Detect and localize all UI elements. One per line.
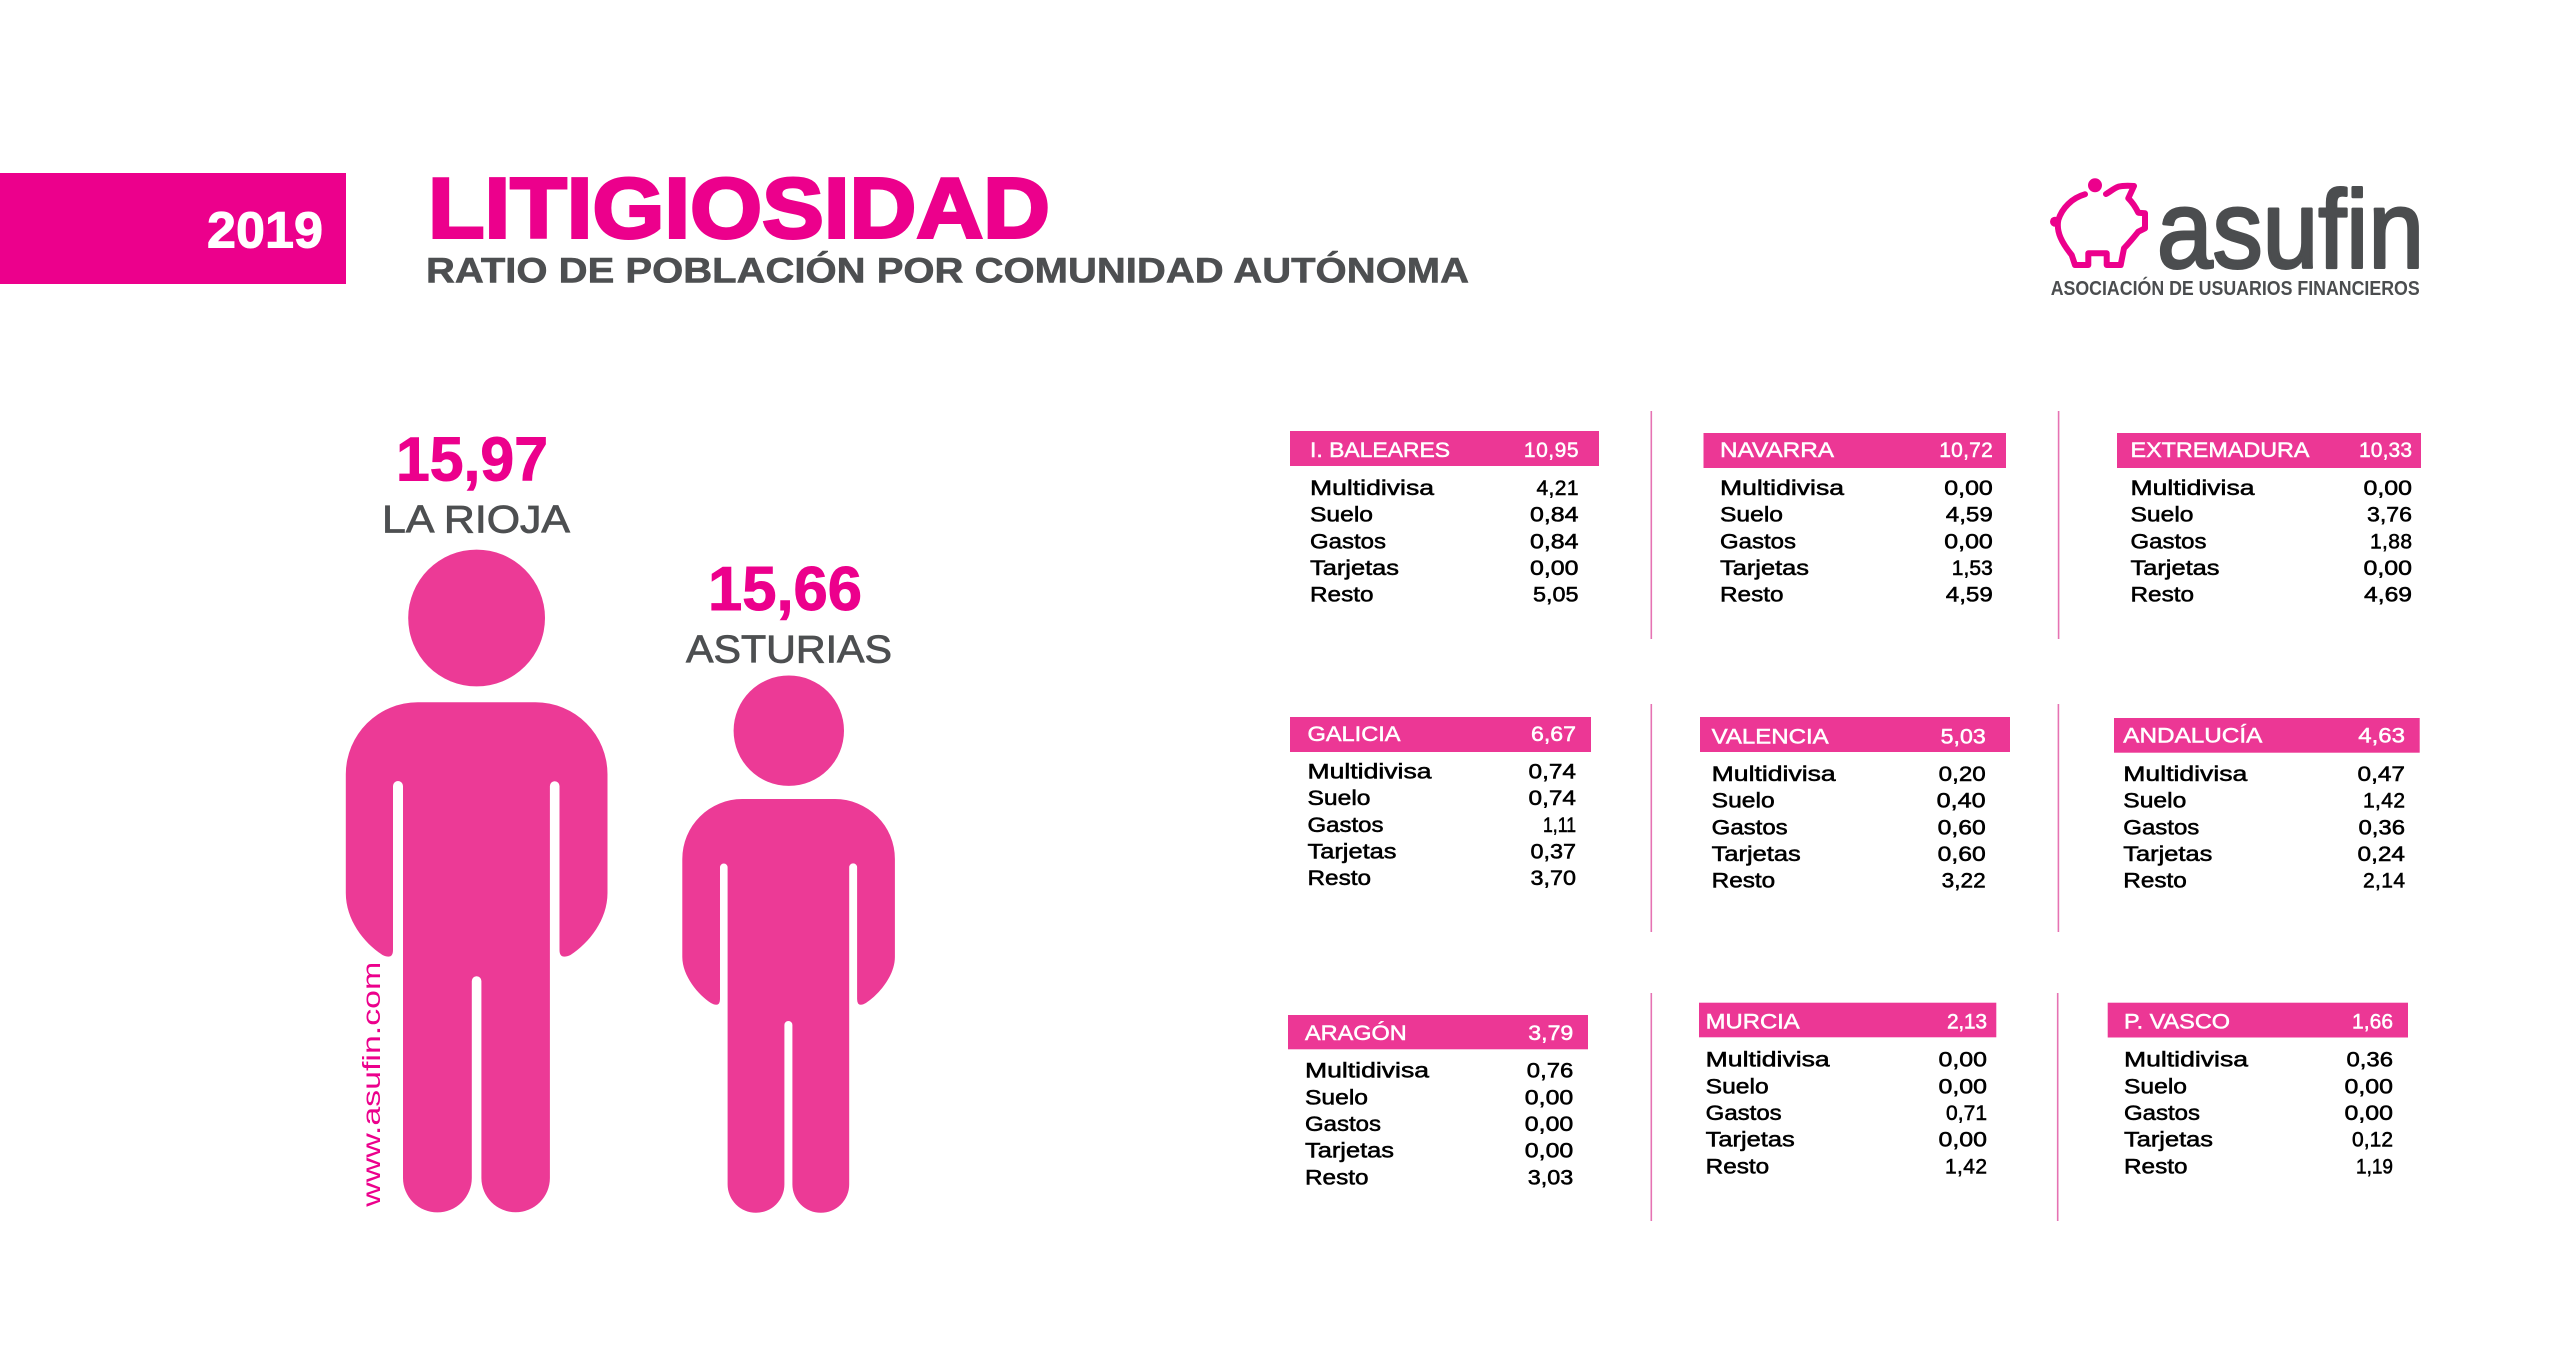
header: Aragón: ARAGÓN xyxy=(1305,1022,1407,1045)
rows: Galicia xyxy=(1308,760,1576,890)
header: Andalucía xyxy=(2114,718,2420,753)
rows: Extremadura: Tarjetas xyxy=(2130,557,2220,580)
rows: Aragón: 0,76 xyxy=(1527,1060,1573,1083)
header: I. Baleares: 10,95 xyxy=(1524,439,1578,462)
logo tagline: ASOCIACIÓN DE USUARIOS FINANCIEROS xyxy=(2051,276,2420,300)
rows: Extremadura: 1,88 xyxy=(2370,530,2412,553)
rows: Extremadura: 3,76 xyxy=(2367,504,2412,527)
rows: Andalucía: Resto xyxy=(2123,870,2187,893)
rows: P. Vasco: Tarjetas xyxy=(2124,1129,2213,1152)
rows: Murcia: Tarjetas xyxy=(1706,1129,1795,1152)
rows: Navarra: 0,00 xyxy=(1944,477,1993,500)
rows: P. Vasco: Multidivisa xyxy=(2124,1049,2248,1072)
rows: I. Baleares: Suelo xyxy=(1310,504,1373,527)
rows: Murcia: Gastos xyxy=(1706,1102,1782,1125)
rows: I. Baleares: 5,05 xyxy=(1533,584,1578,607)
rows: Andalucía: Tarjetas xyxy=(2123,843,2212,866)
panel: Murcia xyxy=(1699,1003,1996,1178)
header: P. Vasco xyxy=(2108,1003,2408,1038)
rows: Valencia: 3,22 xyxy=(1942,870,1986,893)
header: Navarra: 10,72 xyxy=(1939,439,1993,462)
panel: Andalucía xyxy=(2114,718,2420,893)
rows: Navarra: 1,53 xyxy=(1952,557,1993,580)
rows: I. Baleares: Gastos xyxy=(1310,530,1386,553)
rows: P. Vasco: 0,12 xyxy=(2352,1129,2393,1152)
separators xyxy=(1651,411,2059,1221)
header: Valencia xyxy=(1700,717,2010,752)
header: Murcia xyxy=(1699,1003,1996,1037)
header: Galicia xyxy=(1290,717,1591,752)
rows: I. Baleares: 0,00 xyxy=(1530,557,1578,580)
rows: Valencia: 0,60 xyxy=(1938,816,1986,839)
rows: Navarra xyxy=(1720,477,1993,607)
rows: Murcia: Resto xyxy=(1706,1155,1769,1178)
figure: Asturias xyxy=(682,676,895,1213)
rows: Andalucía xyxy=(2123,763,2405,893)
header: P. Vasco: 1,66 xyxy=(2352,1010,2393,1034)
rows: Valencia: Suelo xyxy=(1712,790,1775,813)
header: Andalucía: ANDALUCÍA xyxy=(2123,725,2262,748)
rows: Galicia: Resto xyxy=(1308,867,1371,890)
website url: www.asufin.com xyxy=(358,962,386,1208)
rows: Andalucía: 0,24 xyxy=(2358,843,2405,866)
rows: P. Vasco: 0,00 xyxy=(2344,1102,2393,1125)
header: Murcia: MURCIA xyxy=(1706,1010,1800,1034)
header: Valencia: VALENCIA xyxy=(1712,725,1829,748)
rows: Galicia: Multidivisa xyxy=(1308,760,1432,784)
panel: I. Baleares xyxy=(1290,431,1599,607)
rows: Valencia: Resto xyxy=(1712,870,1775,893)
rows: Andalucía: 2,14 xyxy=(2363,870,2405,893)
rows: Navarra: 4,59 xyxy=(1946,504,1993,527)
value: Asturias: 15,66 xyxy=(708,555,862,624)
rows: Aragón: 3,03 xyxy=(1528,1166,1573,1189)
rows: I. Baleares: 4,21 xyxy=(1536,477,1578,500)
rows: Murcia xyxy=(1706,1049,1987,1178)
rows: Extremadura: Multidivisa xyxy=(2130,477,2255,500)
year banner: 2019 xyxy=(207,202,323,259)
rows: Valencia: 0,40 xyxy=(1937,790,1986,813)
rows: Navarra: Suelo xyxy=(1720,504,1783,527)
rows: Galicia: 0,37 xyxy=(1530,840,1576,864)
rows: Galicia: Suelo xyxy=(1308,787,1370,810)
rows: P. Vasco: 1,19 xyxy=(2356,1155,2393,1178)
rows: Andalucía: Suelo xyxy=(2123,790,2186,813)
header: Valencia: 5,03 xyxy=(1941,725,1986,748)
rows: I. Baleares: Multidivisa xyxy=(1310,477,1434,500)
rows: Valencia: Multidivisa xyxy=(1712,763,1836,786)
rows: Murcia: Multidivisa xyxy=(1706,1049,1830,1072)
rows: P. Vasco: Resto xyxy=(2124,1155,2188,1178)
rows: Extremadura: 0,00 xyxy=(2364,557,2412,580)
rows: Aragón: Gastos xyxy=(1305,1113,1381,1136)
logo wordmark: asufin xyxy=(2157,168,2424,291)
header: Galicia: 6,67 xyxy=(1531,723,1576,746)
panel: Galicia xyxy=(1290,717,1591,890)
rows: Extremadura: 4,69 xyxy=(2364,584,2412,607)
rows: Navarra: Tarjetas xyxy=(1720,557,1809,580)
rows: Valencia: 0,20 xyxy=(1939,763,1986,786)
rows: P. Vasco: Gastos xyxy=(2124,1102,2200,1125)
header: Andalucía: 4,63 xyxy=(2358,725,2405,748)
rows: Extremadura: Suelo xyxy=(2130,504,2194,527)
rows: Andalucía: Multidivisa xyxy=(2123,763,2248,786)
rows: Andalucía: Gastos xyxy=(2123,816,2199,839)
rows: P. Vasco: Suelo xyxy=(2124,1075,2187,1098)
rows: I. Baleares: 0,84 xyxy=(1530,504,1579,527)
year banner xyxy=(0,173,346,284)
icon: piggy bank xyxy=(2050,178,2145,265)
panel: Valencia xyxy=(1700,717,2010,893)
label: Asturias: ASTURIAS xyxy=(686,628,892,671)
rows: Aragón: Multidivisa xyxy=(1305,1060,1429,1083)
rows: P. Vasco: 0,36 xyxy=(2346,1049,2393,1072)
header: P. Vasco: P. VASCO xyxy=(2124,1010,2230,1034)
rows: Aragón: Resto xyxy=(1305,1166,1368,1189)
rows: Valencia xyxy=(1712,763,1986,893)
rows: I. Baleares xyxy=(1310,477,1579,607)
rows: Murcia: 0,00 xyxy=(1938,1049,1987,1072)
rows: Valencia: Gastos xyxy=(1712,816,1788,839)
rows: I. Baleares: Resto xyxy=(1310,584,1374,607)
rows: Navarra: Multidivisa xyxy=(1720,477,1844,500)
header: Extremadura xyxy=(2117,433,2421,468)
header: I. Baleares xyxy=(1290,431,1599,466)
rows: P. Vasco xyxy=(2124,1049,2393,1178)
panel: Navarra xyxy=(1704,433,2006,607)
subtitle: RATIO DE POBLACIÓN POR COMUNIDAD AUTÓNOMA xyxy=(426,250,1469,290)
rows: Extremadura: Gastos xyxy=(2130,530,2206,553)
rows: Andalucía: 0,47 xyxy=(2358,763,2405,786)
rows: Aragón: Tarjetas xyxy=(1305,1140,1394,1163)
header: Galicia: GALICIA xyxy=(1308,723,1400,746)
rows: Galicia: Tarjetas xyxy=(1308,840,1396,864)
panel: P. Vasco xyxy=(2108,1003,2408,1178)
header: Extremadura: EXTREMADURA xyxy=(2130,439,2310,462)
rows: Galicia: Gastos xyxy=(1308,814,1384,837)
header: Navarra: NAVARRA xyxy=(1720,439,1834,462)
rows: Andalucía: 0,36 xyxy=(2358,816,2405,839)
rows: Murcia: Suelo xyxy=(1706,1075,1769,1098)
rows: Navarra: 4,59 xyxy=(1946,584,1993,607)
rows: Valencia: Tarjetas xyxy=(1712,843,1801,866)
label: La Rioja: LA RIOJA xyxy=(382,499,570,542)
header: Aragón: 3,79 xyxy=(1528,1022,1573,1045)
rows: Extremadura xyxy=(2130,477,2412,607)
header: Navarra xyxy=(1704,433,2006,468)
logo: asufin xyxy=(2050,168,2424,300)
rows: Murcia: 0,00 xyxy=(1938,1129,1987,1152)
panel: Extremadura xyxy=(2117,433,2421,607)
rows: Navarra: 0,00 xyxy=(1944,530,1993,553)
rows: Andalucía: 1,42 xyxy=(2363,790,2405,813)
header: Aragón xyxy=(1288,1015,1588,1049)
rows: Aragón: 0,00 xyxy=(1525,1113,1573,1136)
rows: Extremadura: Resto xyxy=(2130,584,2194,607)
rows: Galicia: 3,70 xyxy=(1530,867,1576,890)
rows: Aragón xyxy=(1305,1060,1573,1189)
header: Extremadura: 10,33 xyxy=(2359,439,2412,462)
rows: Galicia: 1,11 xyxy=(1543,814,1576,837)
rows: I. Baleares: 0,84 xyxy=(1530,530,1579,553)
rows: Valencia: 0,60 xyxy=(1938,843,1986,866)
figure: La Rioja xyxy=(346,550,608,1212)
rows: Murcia: 0,00 xyxy=(1938,1075,1987,1098)
rows: Galicia: 0,74 xyxy=(1528,760,1576,784)
header: Murcia: 2,13 xyxy=(1947,1010,1987,1034)
rows: Galicia: 0,74 xyxy=(1528,787,1576,810)
rows: Aragón: 0,00 xyxy=(1525,1086,1573,1109)
rows: Aragón: 0,00 xyxy=(1525,1140,1573,1163)
rows: I. Baleares: Tarjetas xyxy=(1310,557,1399,580)
rows: Navarra: Gastos xyxy=(1720,530,1796,553)
value: La Rioja: 15,97 xyxy=(396,426,548,495)
rows: Aragón: Suelo xyxy=(1305,1086,1368,1109)
rows: Murcia: 1,42 xyxy=(1945,1155,1987,1178)
title: LITIGIOSIDAD xyxy=(428,162,1050,256)
rows: P. Vasco: 0,00 xyxy=(2344,1075,2393,1098)
rows: Navarra: Resto xyxy=(1720,584,1784,607)
rows: Extremadura: 0,00 xyxy=(2364,477,2412,500)
rows: Murcia: 0,71 xyxy=(1946,1102,1987,1125)
header: I. Baleares: I. BALEARES xyxy=(1310,439,1450,462)
panel: Aragón xyxy=(1288,1015,1588,1189)
